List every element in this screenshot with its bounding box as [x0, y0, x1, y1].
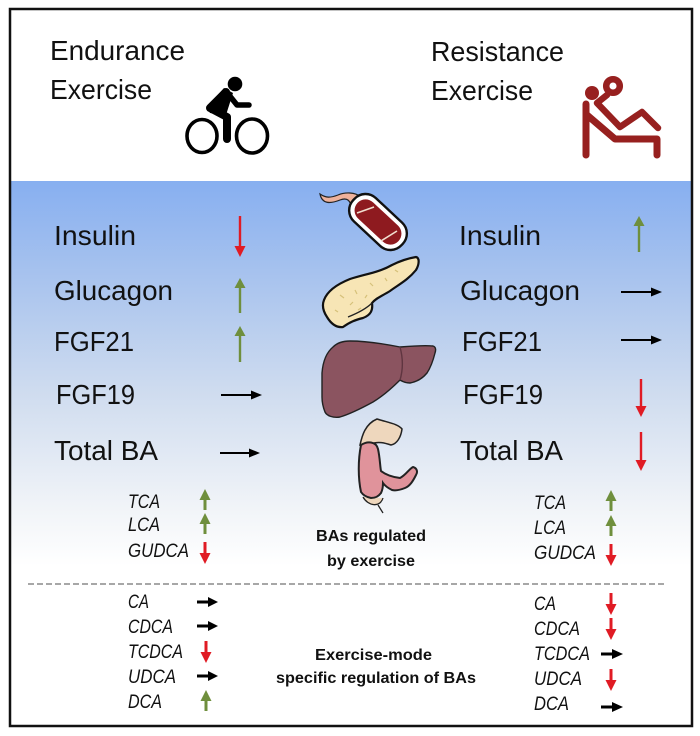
- left shared bile acids: [128, 489, 210, 564]
- organ: intestine: [359, 419, 417, 513]
- dashed divider: [28, 583, 665, 585]
- right hormone labels: [459, 220, 580, 466]
- heading: endurance exercise: Endurance: [50, 35, 185, 66]
- left hormone labels: FGF19: [56, 379, 135, 410]
- label: BAs regulated by exercise: by exercise: [327, 553, 415, 570]
- right mode-specific bile acids: CDCA: [534, 619, 580, 640]
- left shared bile acids: GUDCA: [128, 541, 189, 562]
- icon: bench press: [585, 79, 658, 155]
- right hormone labels: FGF21: [462, 326, 542, 357]
- heading: resistance exercise: Resistance: [431, 36, 564, 67]
- heading: resistance exercise: Exercise: [431, 75, 533, 106]
- left hormone labels: Insulin: [54, 220, 136, 251]
- right shared bile acids: LCA: [534, 518, 566, 539]
- right hormone arrows: [621, 216, 662, 471]
- background gradient panel: [10, 181, 692, 566]
- left hormone labels: FGF21: [54, 326, 134, 357]
- left mode-specific bile acids: UDCA: [128, 667, 176, 688]
- organ: pancreas: [323, 257, 419, 327]
- icon: cyclist: [187, 77, 268, 153]
- right hormone labels: Total BA: [460, 435, 563, 466]
- left shared bile acids: LCA: [128, 515, 160, 536]
- organ: muscle: [320, 188, 413, 256]
- right mode-specific bile acids: CA: [534, 594, 556, 615]
- right mode-specific bile acids: TCDCA: [534, 644, 590, 665]
- label: BAs regulated by exercise: BAs regulated: [316, 528, 426, 545]
- right mode-specific bile acids: DCA: [534, 694, 569, 715]
- heading: endurance exercise: Exercise: [50, 74, 152, 105]
- left mode-specific bile acids: TCDCA: [128, 642, 183, 663]
- label: exercise-mode specific regulation: Exercise-mode: [315, 647, 432, 664]
- label: BAs regulated by exercise: [316, 528, 426, 570]
- right hormone labels: FGF19: [463, 379, 543, 410]
- left shared bile acids: TCA: [128, 492, 160, 513]
- right shared bile acids: GUDCA: [534, 543, 596, 564]
- right mode-specific bile acids: [534, 593, 623, 715]
- right hormone labels: Insulin: [459, 220, 541, 251]
- left hormone labels: Glucagon: [54, 275, 173, 306]
- right shared bile acids: [534, 490, 616, 566]
- organ: liver: [322, 341, 436, 417]
- label: exercise-mode specific regulation: [276, 647, 476, 687]
- right mode-specific bile acids: UDCA: [534, 669, 582, 690]
- heading: resistance exercise: [431, 36, 564, 106]
- right shared bile acids: TCA: [534, 493, 566, 514]
- right hormone labels: Glucagon: [460, 275, 580, 306]
- left mode-specific bile acids: DCA: [128, 692, 162, 713]
- left hormone labels: Total BA: [54, 435, 158, 466]
- left mode-specific bile acids: CDCA: [128, 617, 173, 638]
- heading: endurance exercise: [50, 35, 185, 105]
- left hormone labels: [54, 220, 173, 466]
- left hormone arrows: [220, 216, 262, 458]
- left mode-specific bile acids: [128, 592, 218, 713]
- left mode-specific bile acids: CA: [128, 592, 149, 613]
- label: exercise-mode specific regulation: specific regulation of BAs: [276, 670, 476, 687]
